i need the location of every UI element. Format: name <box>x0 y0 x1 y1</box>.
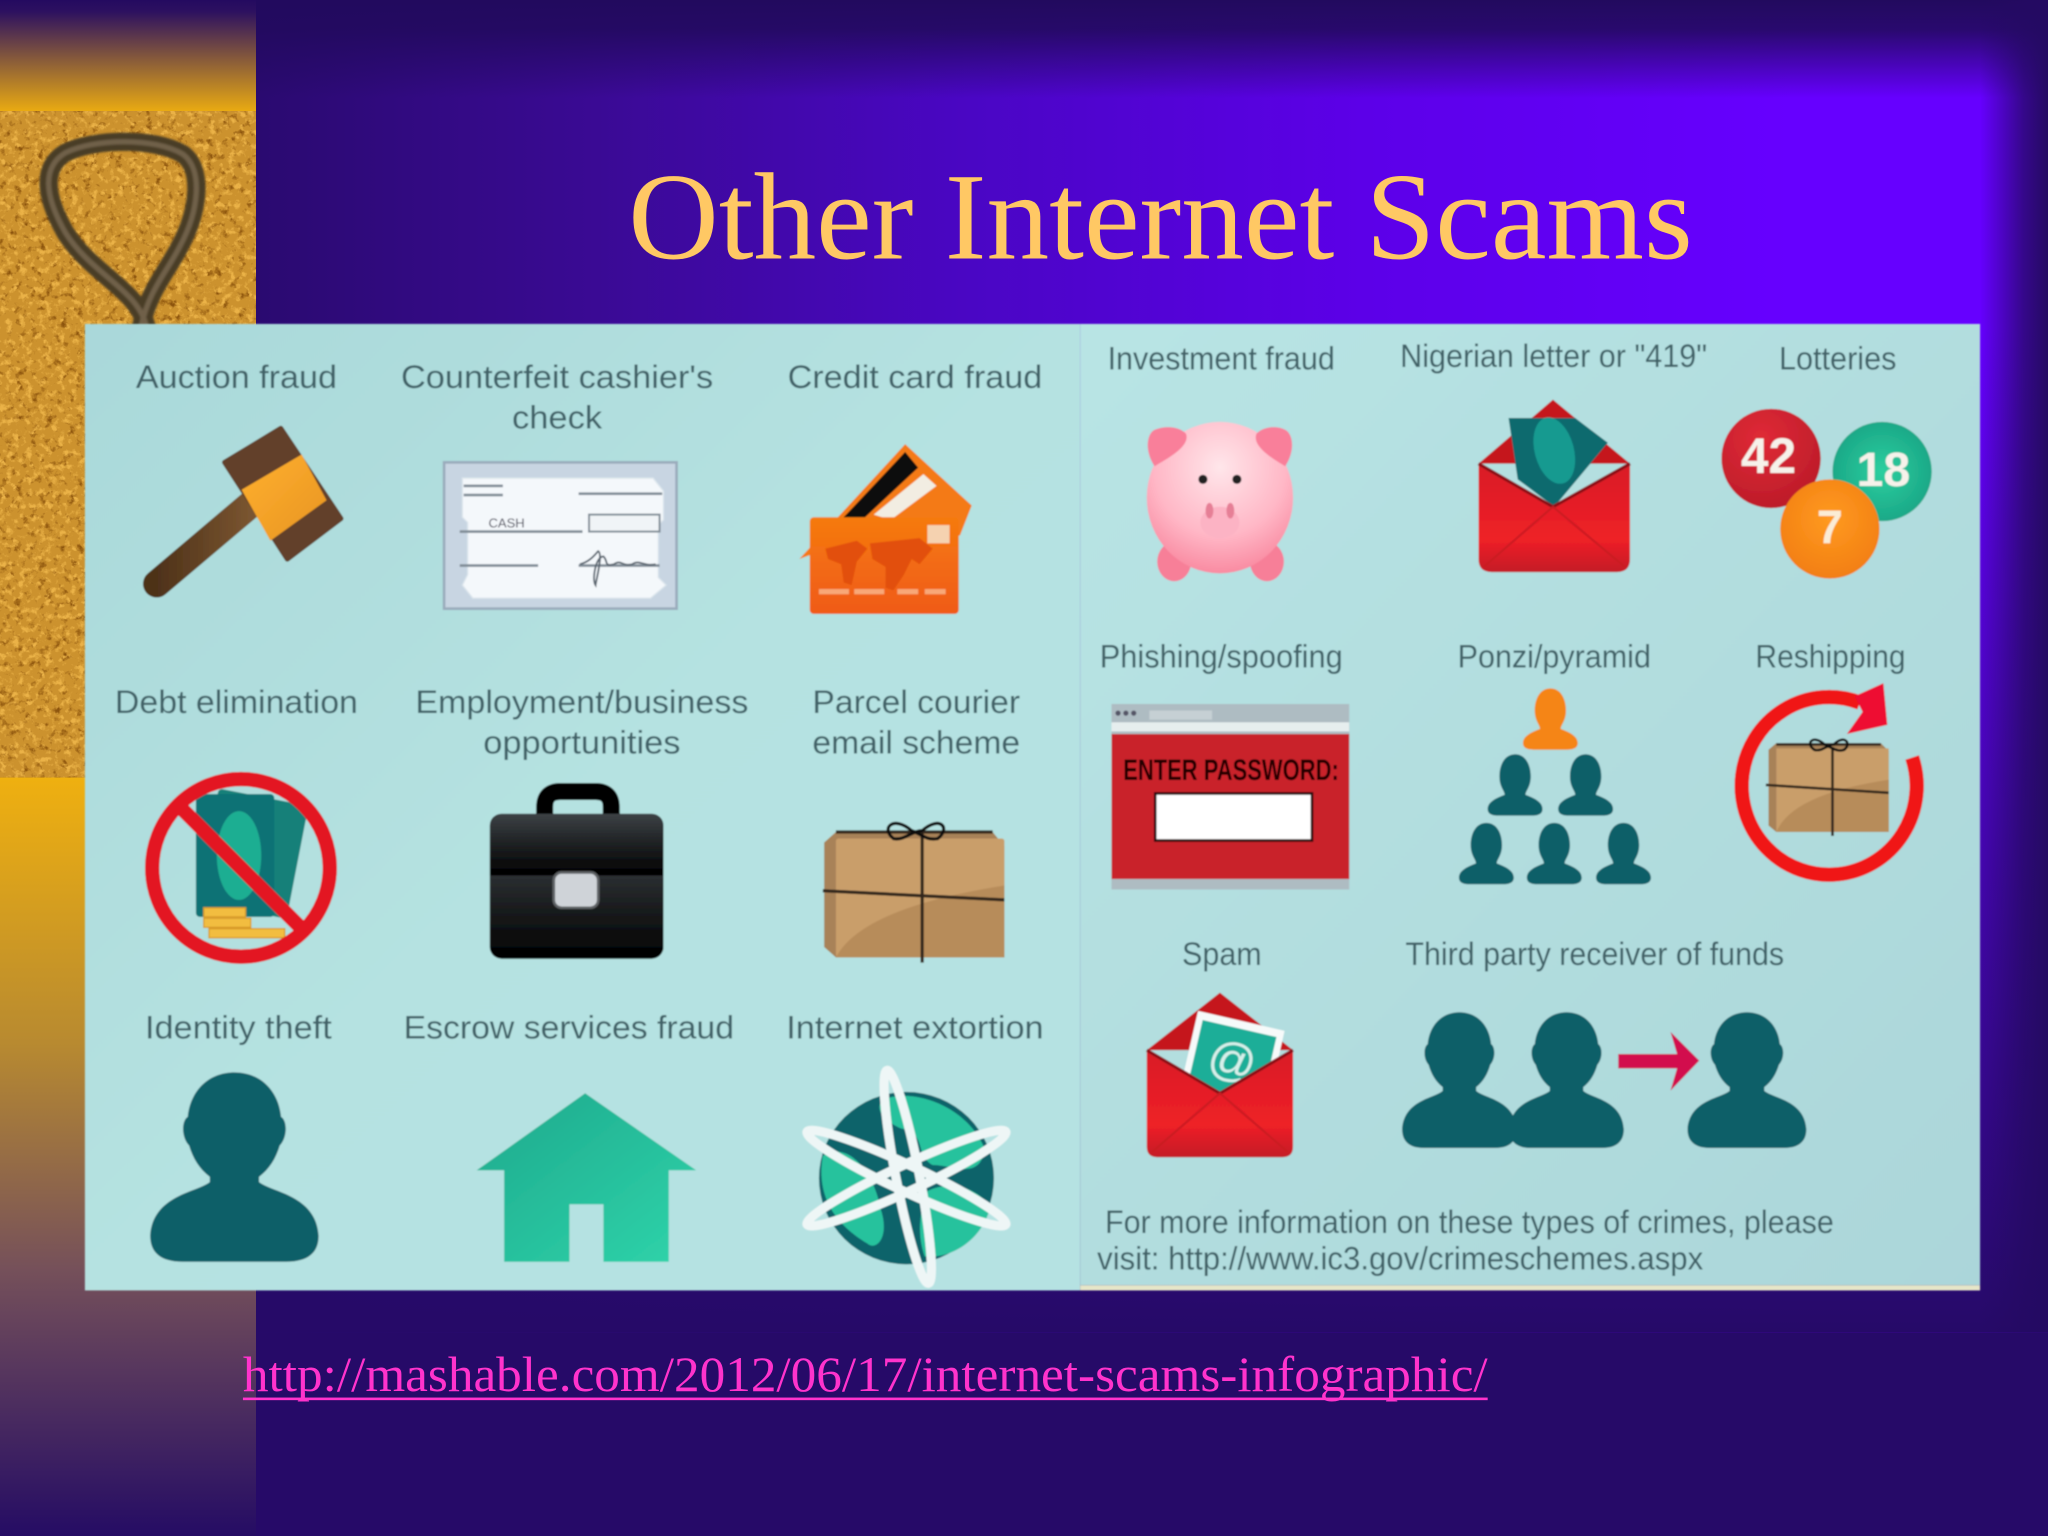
icon: parcel <box>823 823 1004 963</box>
label: Employment/business opportunities: opportunities <box>483 724 680 761</box>
arrow: funds transfer <box>1618 1032 1699 1091</box>
person: second sender <box>1509 1012 1624 1148</box>
label: Ponzi/pyramid: Ponzi/pyramid <box>1458 637 1651 674</box>
icon: ponzi pyramid of people <box>1459 688 1651 884</box>
icon: identity person <box>150 1072 319 1262</box>
icon: envelope with money <box>1479 400 1630 572</box>
label: Counterfeit cashier's check: Counterfeit cashier's <box>401 358 713 395</box>
label: Spam: Spam <box>1182 935 1262 972</box>
text block: more information note <box>1097 1203 1834 1277</box>
panel: right half background <box>1080 324 1980 1290</box>
text block: more information note: For more information on these types of crimes, please <box>1105 1203 1834 1240</box>
label: Employment/business opportunities <box>415 683 748 761</box>
icon: phishing password window <box>1112 704 1349 889</box>
label: Employment/business opportunities: Employment/business <box>415 683 748 720</box>
icon: cashier's check: CASH <box>488 516 525 531</box>
icon: phishing password window: ENTER PASSWORD: <box>1123 754 1339 787</box>
icon: third party receiver people and arrow <box>1402 1012 1806 1148</box>
icon: briefcase <box>490 792 664 959</box>
person: first sender <box>1402 1012 1517 1148</box>
icon: credit cards <box>799 444 972 614</box>
label: Nigerian letter or 419: Nigerian letter or "419" <box>1400 337 1707 374</box>
icon: cashier's check <box>444 462 677 609</box>
label: Reshipping: Reshipping <box>1755 637 1906 674</box>
icon: reshipping parcel with arrow <box>1742 683 1917 875</box>
label: Third party receiver of funds: Third party receiver of funds <box>1405 935 1784 972</box>
icon: lottery balls <box>1721 409 1932 579</box>
icon: spam envelope: @ <box>1203 1028 1262 1091</box>
panel: scam types infographic <box>85 324 1980 1290</box>
left strip: gold gradient with sand photo <box>0 0 256 1536</box>
panel: left half background <box>85 324 1080 1290</box>
label: Phishing/spoofing: Phishing/spoofing <box>1100 637 1343 674</box>
label: Lotteries: Lotteries <box>1779 340 1896 377</box>
icon: house <box>477 1093 696 1262</box>
label: Internet extortion: Internet extortion <box>786 1008 1044 1045</box>
icon: globe with orbits <box>801 1068 1011 1285</box>
label: Counterfeit cashier's check: check <box>512 398 603 435</box>
label: Parcel courier email scheme: email scheme <box>812 724 1020 761</box>
icon: piggy bank <box>1147 422 1293 581</box>
icon: lottery balls: 42 <box>1741 428 1796 484</box>
label: Debt elimination: Debt elimination <box>115 683 358 720</box>
icon: spam envelope <box>1147 993 1293 1157</box>
label: Parcel courier email scheme: Parcel courier <box>812 683 1020 720</box>
text block: more information note: visit: http://www.ic3.gov/crimeschemes.aspx <box>1097 1240 1703 1277</box>
label: Parcel courier email scheme <box>812 683 1020 761</box>
icon: gavel <box>157 428 341 584</box>
person: receiver <box>1688 1012 1806 1148</box>
icon: rope loop on sand <box>49 142 196 327</box>
label: Counterfeit cashier's check <box>401 358 713 435</box>
label: Credit card fraud: Credit card fraud <box>788 358 1042 395</box>
label: Identity theft: Identity theft <box>145 1008 332 1045</box>
icon: no debt sign <box>152 779 330 957</box>
sand texture <box>0 111 256 777</box>
source link: http://mashable.com/2012/06/17/internet-scams-infographic/ <box>243 1347 1488 1402</box>
icon: lottery balls: 7 <box>1817 500 1843 553</box>
icon: lottery balls: 18 <box>1857 443 1910 497</box>
title: Other Internet Scams <box>628 148 1693 286</box>
label: Escrow services fraud: Escrow services fraud <box>404 1008 734 1045</box>
label: Auction fraud: Auction fraud <box>136 358 337 395</box>
label: Investment fraud: Investment fraud <box>1108 340 1335 377</box>
